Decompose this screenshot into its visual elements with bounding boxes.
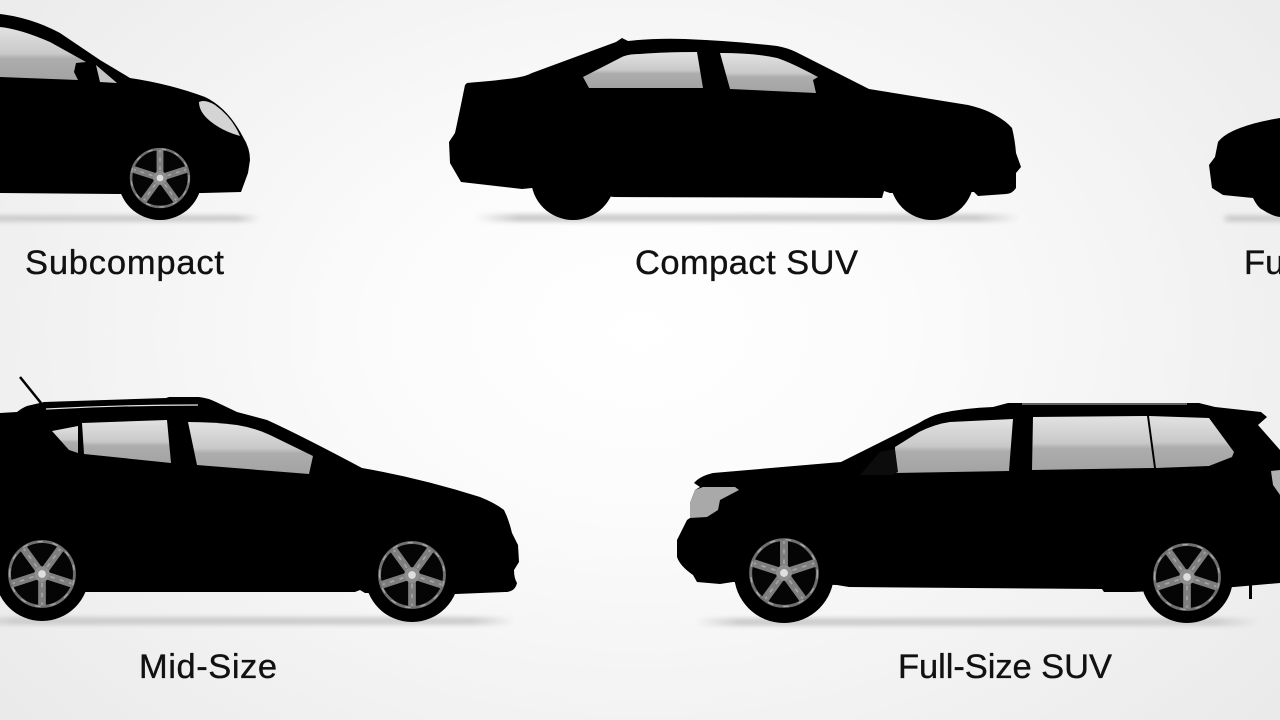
vehicle: Mid-Size xyxy=(0,377,519,686)
wheel xyxy=(130,148,190,208)
front tire xyxy=(365,528,459,622)
roof rail highlight xyxy=(1022,403,1187,405)
front wheel xyxy=(378,541,446,609)
rear window xyxy=(583,52,703,88)
headlight xyxy=(690,487,739,518)
headlight xyxy=(199,101,240,136)
label: Compact SUV: Compact SUV xyxy=(635,244,858,282)
ground shadow xyxy=(1222,215,1280,222)
rear tire xyxy=(0,527,89,621)
ground shadow xyxy=(695,618,1260,626)
car silhouette xyxy=(677,403,1280,592)
quarter window xyxy=(96,65,117,83)
label: Full-Size SUV: Full-Size SUV xyxy=(898,648,1112,686)
roof rail highlight xyxy=(46,405,198,409)
rear tire xyxy=(1141,531,1233,623)
label: Mid-Size: Mid-Size xyxy=(139,648,277,686)
front window xyxy=(188,422,313,474)
tow hook xyxy=(1249,585,1252,599)
front tire xyxy=(890,136,974,220)
label: Subcompact: Subcompact xyxy=(25,244,224,282)
rear window xyxy=(82,420,171,463)
car silhouette xyxy=(449,38,1021,198)
mirror xyxy=(860,449,898,475)
car silhouette xyxy=(1209,118,1280,217)
tail light xyxy=(1271,470,1280,495)
front window xyxy=(895,419,1013,473)
vehicle: Full-Size (cropped at right edge) xyxy=(1209,118,1280,282)
ground shadow xyxy=(0,215,260,222)
front tire xyxy=(734,523,834,623)
rear tire xyxy=(531,136,615,220)
rear wheel xyxy=(1153,543,1221,611)
quarter window xyxy=(52,426,78,453)
rear window xyxy=(1149,416,1234,468)
tire xyxy=(118,136,202,220)
front wheel xyxy=(749,538,819,608)
car silhouette xyxy=(0,397,519,594)
antenna xyxy=(20,377,41,403)
front window xyxy=(0,27,86,80)
middle window xyxy=(1032,416,1154,470)
ground shadow xyxy=(475,214,1020,222)
car silhouette xyxy=(0,14,250,194)
vehicle: Subcompact xyxy=(0,14,260,282)
vehicle: Full-Size SUV xyxy=(677,403,1280,686)
ground shadow xyxy=(0,617,515,625)
vehicle: Compact SUV xyxy=(449,38,1021,282)
rear wheel xyxy=(8,540,76,608)
front window xyxy=(720,53,818,93)
